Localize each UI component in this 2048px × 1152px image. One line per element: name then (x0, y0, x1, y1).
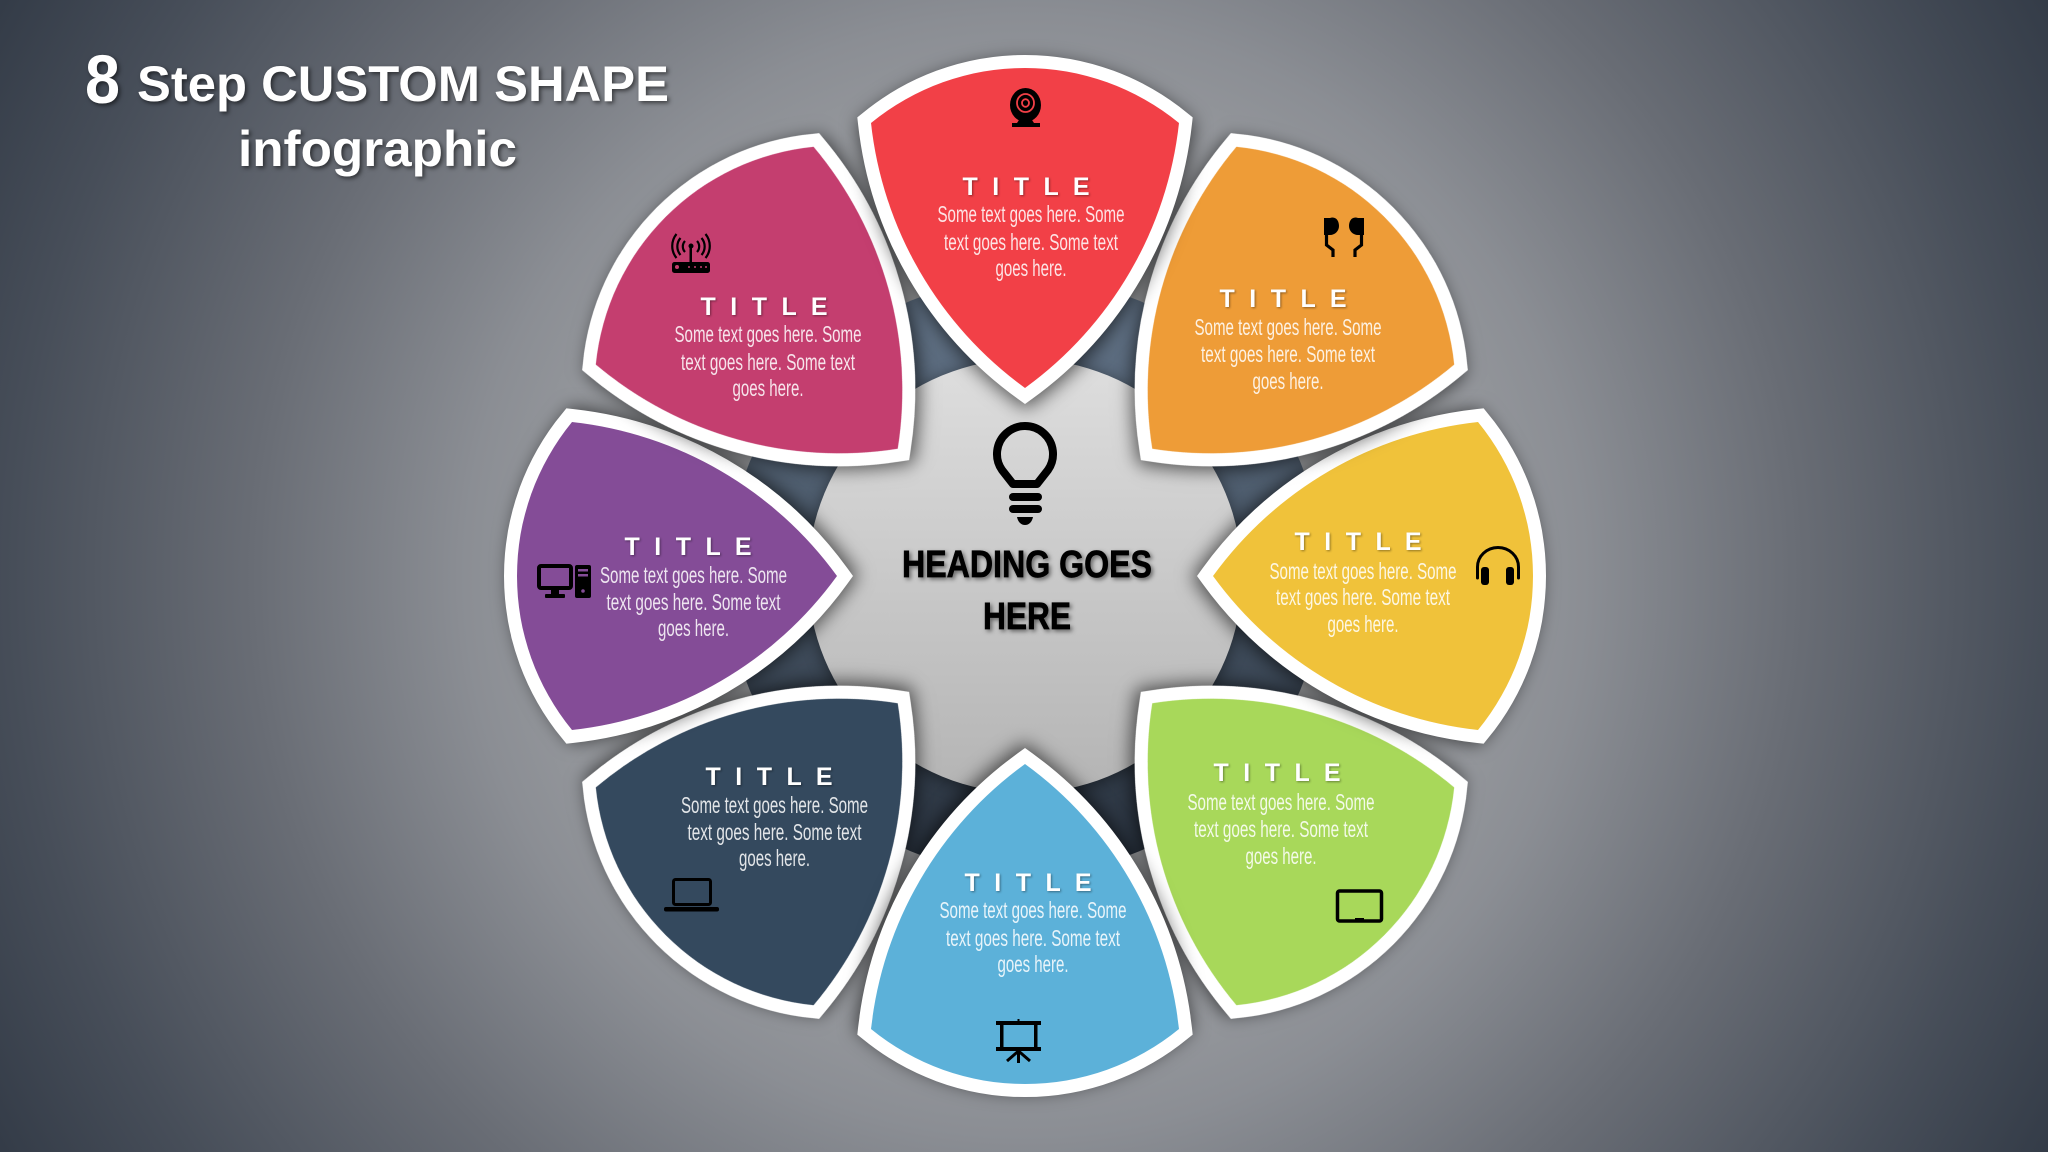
purple text: goes here. (658, 615, 729, 641)
magenta text (674, 293, 862, 401)
center heading (902, 544, 1152, 638)
yellow text (1270, 528, 1456, 637)
title (85, 41, 669, 177)
icon: earphones (1324, 218, 1364, 257)
petal: magenta (557, 108, 1007, 558)
blue text (940, 869, 1126, 977)
blue text: goes here. (998, 951, 1068, 977)
icon: light bulb (997, 426, 1053, 525)
red text: goes here. (996, 255, 1066, 281)
center circle (808, 359, 1242, 793)
title: number 8: 8 (85, 41, 120, 118)
icon: headphones (1478, 548, 1518, 585)
magenta text: T I T L E (700, 293, 828, 321)
green text: T I T L E (1214, 759, 1340, 787)
navy text: T I T L E (706, 763, 832, 791)
orange text: T I T L E (1220, 285, 1346, 313)
icon: laptop (664, 880, 719, 912)
yellow text: goes here. (1328, 611, 1398, 637)
petal: red (871, 68, 1179, 388)
blue text: text goes here. Some text (946, 925, 1120, 951)
icon: webcam (1010, 88, 1041, 127)
backing disc (727, 278, 1323, 874)
orange text: Some text goes here. Some (1194, 314, 1382, 340)
orange text: goes here. (1252, 368, 1324, 394)
purple text (600, 533, 787, 641)
orange text (1194, 285, 1382, 394)
purple text: Some text goes here. Some (600, 562, 787, 588)
center heading: HEADING GOES (902, 544, 1152, 586)
icon: wifi router (672, 234, 710, 273)
title: line 1: Step CUSTOM SHAPE (137, 56, 669, 112)
petal: yellow (1213, 422, 1533, 730)
red text: T I T L E (962, 173, 1090, 201)
yellow text: text goes here. Some text (1276, 584, 1450, 610)
navy text: goes here. (739, 845, 810, 871)
magenta text: Some text goes here. Some (674, 321, 862, 347)
green text (1188, 759, 1374, 869)
blue text: Some text goes here. Some (940, 897, 1126, 923)
blue text: T I T L E (964, 869, 1092, 897)
yellow text: Some text goes here. Some (1270, 558, 1456, 584)
green text: Some text goes here. Some (1188, 789, 1374, 815)
orange text: text goes here. Some text (1201, 341, 1375, 367)
yellow text: T I T L E (1294, 528, 1422, 556)
magenta text: text goes here. Some text (681, 349, 855, 375)
petal: purple (517, 422, 837, 730)
purple text: T I T L E (624, 533, 752, 561)
purple text: text goes here. Some text (606, 589, 781, 615)
red text: Some text goes here. Some (938, 201, 1124, 227)
icon: tablet (1338, 891, 1382, 921)
green text: goes here. (1246, 843, 1316, 869)
petal: navy (557, 594, 1007, 1044)
icon: desktop computer (539, 565, 591, 598)
petal: green (1043, 594, 1493, 1044)
navy text: text goes here. Some text (688, 819, 862, 845)
red text: text goes here. Some text (944, 229, 1118, 255)
icon: presentation board (996, 1019, 1041, 1063)
petal: blue (871, 764, 1179, 1084)
navy text (681, 763, 868, 871)
petal: orange (1043, 108, 1493, 558)
title: line 2: infographic (238, 121, 517, 177)
center heading: HERE (983, 596, 1071, 638)
magenta text: goes here. (732, 375, 804, 401)
red text (938, 173, 1124, 281)
green text: text goes here. Some text (1194, 816, 1368, 842)
navy text: Some text goes here. Some (681, 792, 868, 818)
